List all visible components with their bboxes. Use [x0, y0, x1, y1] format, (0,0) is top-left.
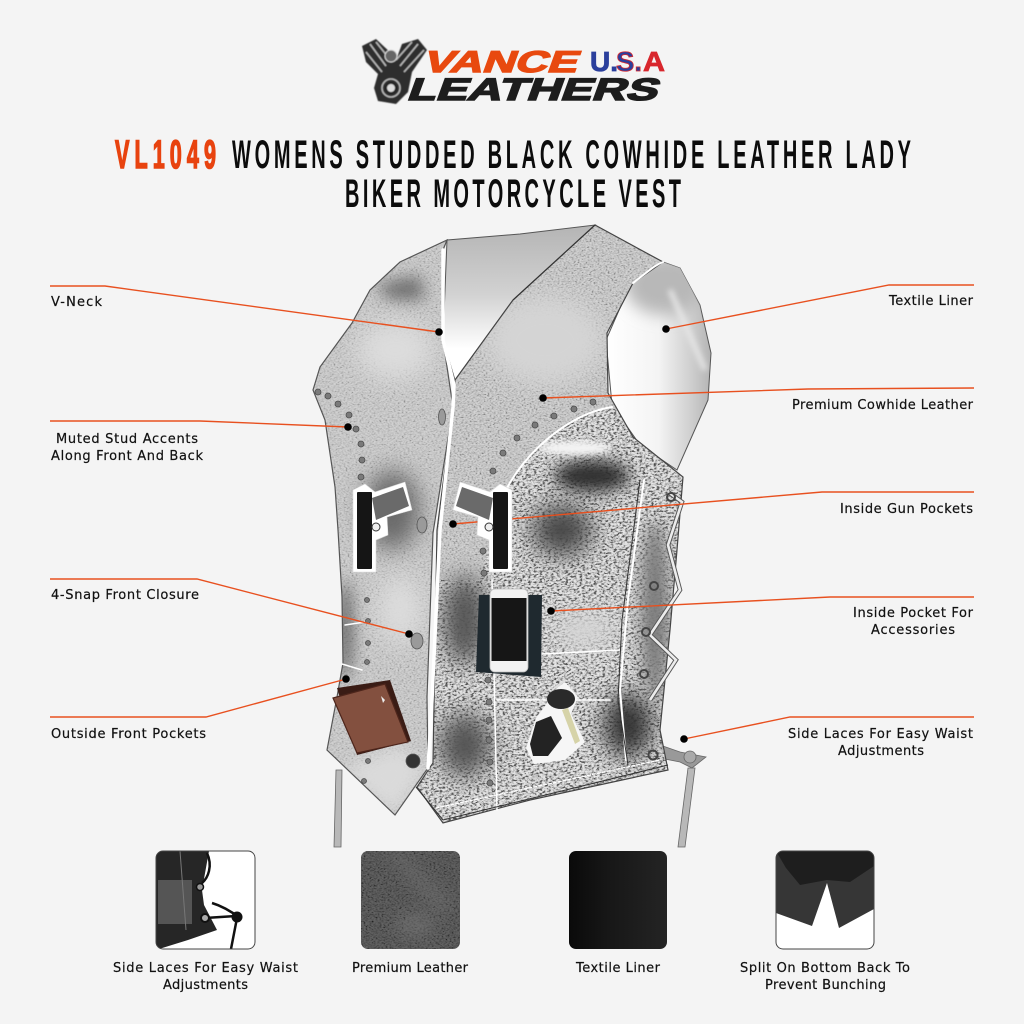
title: VL1049	[115, 132, 216, 177]
panel: thumbnail textile liner	[569, 851, 667, 949]
callout: outside pockets	[50, 675, 350, 717]
pocket: dark pouch	[476, 595, 542, 677]
labels: thumbnail captions	[113, 961, 910, 993]
title: WOMENS STUDDED BLACK COWHIDE LEATHER LADY	[232, 131, 911, 177]
wordmark: LEATHERS: LEATHERS	[404, 72, 666, 107]
wordmark: VANCE: VANCE	[420, 45, 586, 79]
labels: right column	[788, 294, 974, 759]
title: BIKER MOTORCYCLE VEST	[345, 170, 681, 216]
icon: brown wallet	[333, 680, 411, 755]
label: Outside Front Pockets: Outside Front Pockets	[51, 727, 206, 742]
vest illustration	[300, 220, 711, 847]
callout lines and dots	[50, 285, 974, 743]
panel: thumbnail premium leather	[361, 851, 460, 949]
vest: lace grommets and cross lacing	[640, 492, 682, 760]
icon: phone in pocket	[476, 589, 542, 677]
label: Muted Stud Accents: Along Front And Back	[51, 449, 203, 464]
label: Inside Pocket For Accessories: Accessories	[871, 623, 955, 638]
wordmark: U.S.A: A	[643, 46, 665, 77]
label: Inside Gun Pockets: Inside Gun Pockets	[840, 502, 973, 517]
panel: thumbnail side laces	[156, 851, 255, 949]
caption: side laces: Side Laces For Easy Waist	[113, 961, 298, 976]
callout: muted studs	[50, 421, 352, 431]
caption: split on bottom back: Split On Bottom Back To	[740, 961, 910, 976]
label: Inside Pocket For Accessories: Inside Pocket For	[853, 606, 974, 621]
label: Side Laces: Side Laces For Easy Waist	[788, 727, 973, 742]
vest: side lace strands	[334, 745, 706, 847]
label: Side Laces	[788, 727, 973, 759]
label: Side Laces: Adjustments	[838, 744, 924, 759]
callout: side laces	[680, 717, 974, 743]
vest: back collar and inner lining	[443, 225, 595, 380]
label: Premium Cowhide Leather: Premium Cowhide Leather	[792, 398, 974, 413]
vest: textile liner through armhole	[606, 255, 711, 470]
caption: premium leather: Premium Leather	[352, 961, 469, 976]
caption: textile liner: Textile Liner	[575, 961, 661, 976]
callout: premium cowhide	[539, 388, 974, 402]
label: Muted Stud Accents: Muted Stud Accents	[56, 432, 198, 447]
label: V-Neck: V-Neck	[51, 295, 102, 310]
phone	[490, 589, 528, 672]
icon: right gun	[453, 482, 512, 572]
vest: white seams	[342, 250, 663, 810]
caption: side laces: Adjustments	[163, 978, 248, 993]
vest: snap holes	[406, 409, 446, 768]
callout: 4-snap closure	[50, 579, 413, 638]
icon: v-twin engine	[362, 39, 427, 104]
caption: side laces	[113, 961, 298, 993]
panel: thumbnail split back	[776, 851, 874, 949]
callout: textile liner	[662, 285, 974, 333]
label: Muted Stud Accents	[51, 432, 203, 464]
label: Inside Pocket For Accessories	[853, 606, 974, 638]
wordmark: U.S.A: U.	[590, 46, 618, 77]
wordmark: U.S.A: S.	[616, 46, 642, 77]
callout: inside pocket	[547, 597, 974, 615]
vest: left front panel	[312, 239, 452, 816]
vest: right front panel	[416, 224, 684, 824]
caption: split on bottom back: Prevent Bunching	[765, 978, 886, 993]
vest: studs along front and back	[315, 389, 596, 786]
labels: left column	[51, 295, 206, 742]
icon: left gun	[353, 482, 412, 572]
caption: split on bottom back	[740, 961, 910, 993]
icon: car keys	[526, 680, 585, 764]
callout: V-Neck	[50, 286, 443, 336]
title	[115, 131, 911, 216]
logo: Vance Leathers USA	[362, 39, 666, 107]
callout: gun pockets	[449, 492, 974, 528]
label: Textile Liner: Textile Liner	[888, 294, 974, 309]
vest: dark stitch lines	[416, 225, 668, 820]
wordmark: U.S.A	[590, 46, 665, 77]
label: 4-Snap Front Closure: 4-Snap Front Closure	[51, 588, 199, 603]
